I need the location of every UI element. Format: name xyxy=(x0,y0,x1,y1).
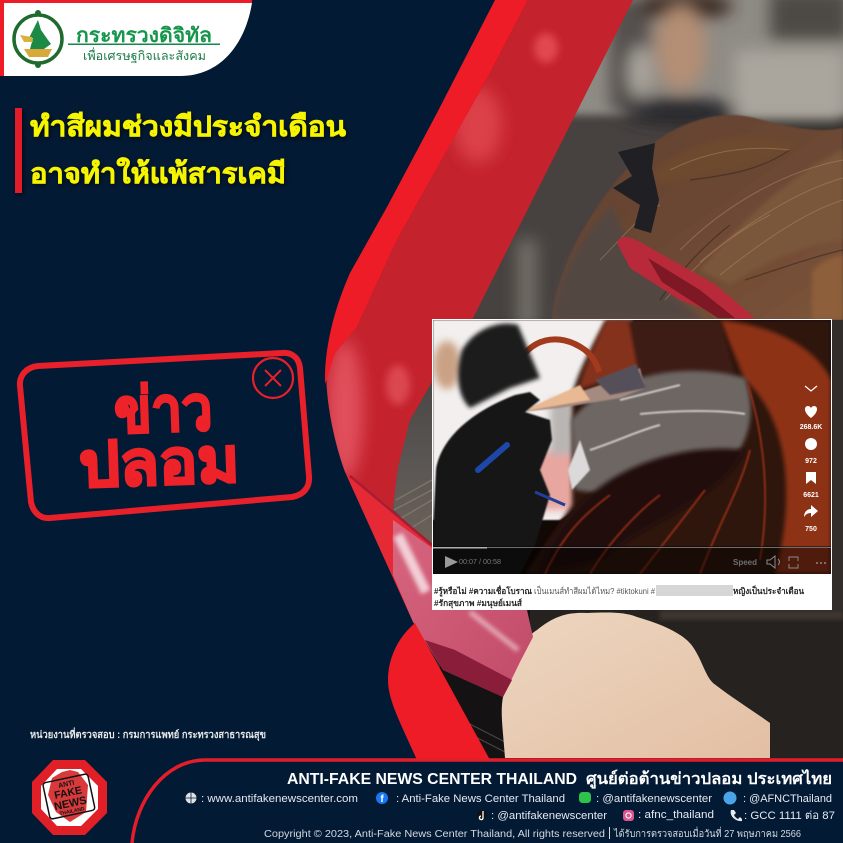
video frame xyxy=(433,320,831,574)
phone number: : GCC 1111 ต่อ 87 xyxy=(744,810,835,822)
icon: comment xyxy=(805,438,817,450)
facebook handle: : Anti-Fake News Center Thailand xyxy=(396,793,565,805)
twitter handle: : @AFNCThailand xyxy=(743,793,832,805)
player icons xyxy=(767,556,826,568)
bookmark count: 6621 xyxy=(803,492,819,499)
photo: salon background xyxy=(320,0,843,760)
title line 2: อาจทำให้แพ้สารเคมี xyxy=(30,157,286,189)
red translucent band xyxy=(325,0,633,535)
icon: instagram xyxy=(623,810,634,821)
line handle: : @antifakenewscenter xyxy=(596,793,712,805)
gray patch behind band xyxy=(393,380,432,545)
ministry logo panel xyxy=(0,0,252,76)
footer panel xyxy=(132,760,843,843)
caption end: หญิงเป็นประจำเดือน xyxy=(733,584,804,597)
stamp word 1: ข่าว xyxy=(113,374,213,447)
logo word: thailand: THAILAND xyxy=(59,806,86,817)
ministry name: กระทรวงดิจิทัล xyxy=(76,25,212,47)
gloves xyxy=(458,324,540,408)
website: : www.antifakenewscenter.com xyxy=(201,793,358,805)
icon: red hair clip xyxy=(617,237,755,320)
icon: heart xyxy=(805,406,817,418)
icon: globe xyxy=(186,792,196,804)
pink hair dryer xyxy=(345,472,533,697)
speed label: Speed xyxy=(733,558,757,567)
instagram handle: : afnc_thailand xyxy=(638,809,714,821)
video time: 00:07 / 00:58 xyxy=(459,557,501,566)
icon: phone xyxy=(731,810,742,821)
caption xyxy=(434,584,804,609)
side action icons xyxy=(800,386,822,533)
icon: black hair clip xyxy=(613,143,659,233)
icon: twitter xyxy=(724,792,736,804)
anti-fake news logo xyxy=(32,760,107,835)
title block xyxy=(15,108,346,193)
share count: 750 xyxy=(805,526,817,533)
like count: 268.6K xyxy=(800,424,822,431)
icon: ministry emblem xyxy=(14,10,62,68)
title line 1: ทำสีผมช่วงมีประจำเดือน xyxy=(30,111,346,142)
inset: video screenshot xyxy=(432,319,832,610)
footer heading thai: ศูนย์ต่อต้านข่าวปลอม ประเทศไทย xyxy=(586,769,832,790)
logo word: anti: ANTI xyxy=(58,780,75,790)
photo: brown hair with clips xyxy=(552,115,843,320)
footer heading: ANTI-FAKE NEWS CENTER THAILAND xyxy=(287,771,577,788)
icon: facebook xyxy=(376,792,388,805)
progress bar xyxy=(433,547,831,548)
comment count: 972 xyxy=(805,458,817,465)
photo: hand, sweater and pink hair dryer xyxy=(440,320,843,760)
icon: line xyxy=(579,792,591,803)
dark red hair xyxy=(525,320,831,574)
logo word: fake: FAKE xyxy=(53,784,83,802)
red rounded shape xyxy=(388,623,490,760)
caption: #รู้หรือไม่ #ความเชื่อโบราณ xyxy=(434,584,532,597)
caption middle: เป็นเมนส์ทำสีผมได้ไหม? #tiktokuni # xyxy=(534,585,655,596)
tiktok handle: : @antifakenewscenter xyxy=(491,810,607,822)
icon: play xyxy=(445,556,458,568)
ministry tagline: เพื่อเศรษฐกิจและสังคม xyxy=(83,47,206,63)
source note: หน่วยงานที่ตรวจสอบ : กรมการแพทย์ กระทรวงสาธารณสุข xyxy=(30,727,266,741)
icon: tiktok xyxy=(477,810,487,820)
comb xyxy=(520,368,645,412)
navy left panel xyxy=(0,0,495,760)
stamp word 2: ปลอม xyxy=(78,426,240,501)
verification date: ได้รับการตรวจสอบเมื่อวันที่ 27 พฤษภาคม 2566 xyxy=(613,826,801,840)
icon: bookmark xyxy=(806,472,816,484)
copyright: Copyright © 2023, Anti-Fake News Center Thailand, All rights reserved xyxy=(264,829,605,840)
caption line 2: #รักสุขภาพ #มนุษย์เมนส์ xyxy=(434,598,523,609)
blurred box xyxy=(656,585,733,596)
icon: x circle xyxy=(253,358,293,398)
stamp: fake news xyxy=(20,353,309,518)
icon: share xyxy=(804,505,818,517)
logo word: news: NEWS xyxy=(53,795,88,813)
hand xyxy=(502,612,770,758)
controls gradient xyxy=(433,546,831,574)
icon: facebook: f xyxy=(380,794,384,805)
bright red band xyxy=(325,0,528,384)
